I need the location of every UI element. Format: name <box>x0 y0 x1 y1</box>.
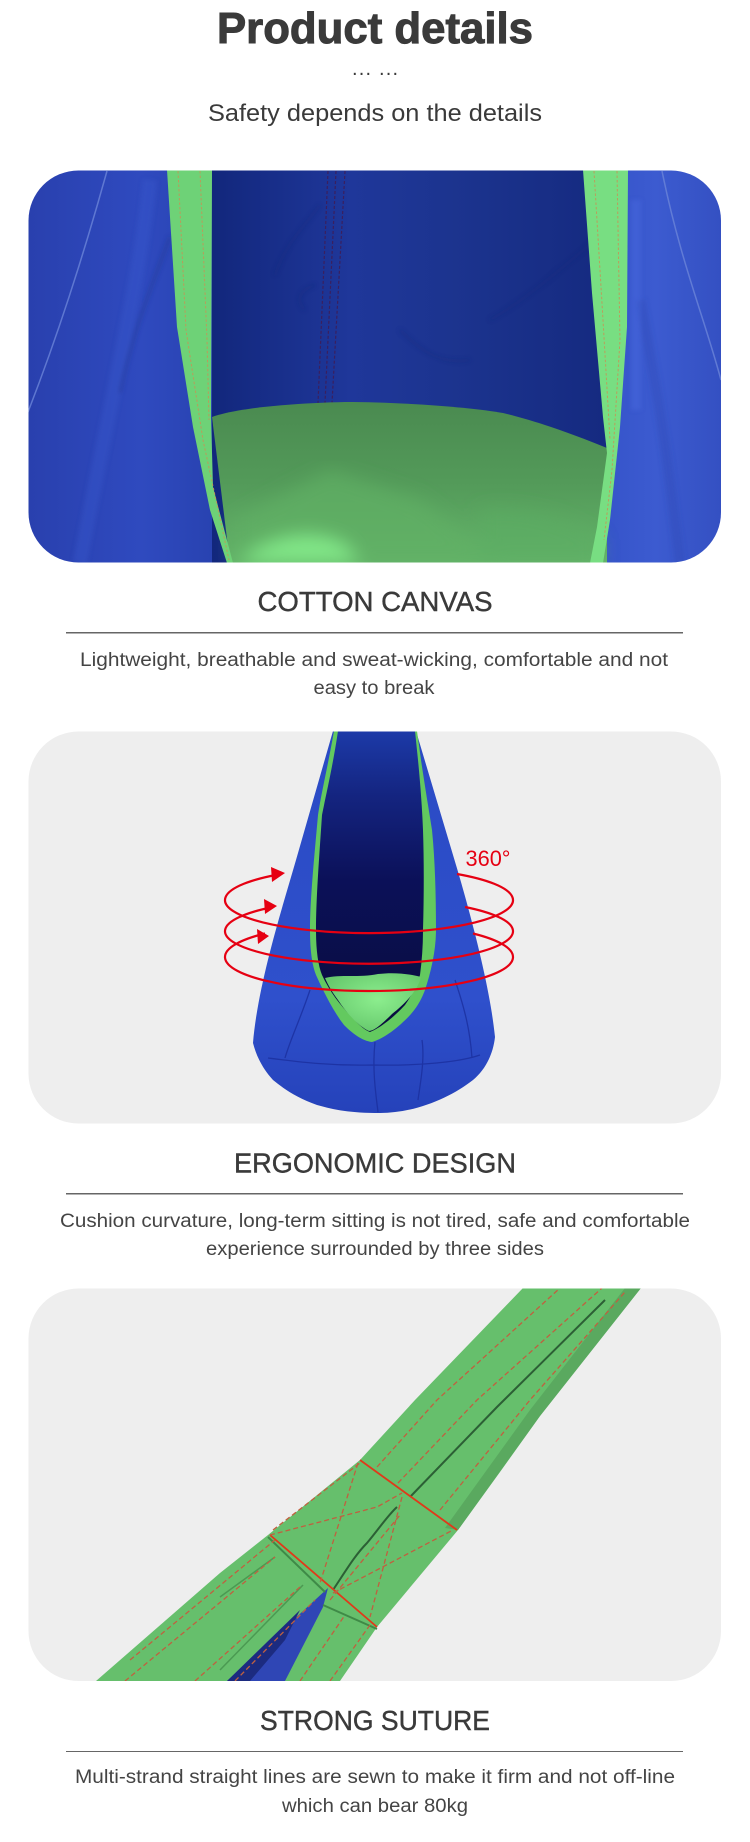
description: cotton canvas: Lightweight, breathable and sweat-wicking, comfortable and not <box>80 650 669 671</box>
decorative ellipsis: ... ... <box>352 58 398 80</box>
left outer blue fabric <box>28 170 212 562</box>
rotation rings <box>225 874 513 991</box>
description: ergonomic design <box>60 1211 690 1260</box>
heading: ergonomic design: ERGONOMIC DESIGN <box>234 1148 516 1178</box>
subtitle: Safety depends on the details <box>208 100 542 127</box>
right outer blue fabric <box>606 170 721 562</box>
middle ring <box>225 907 513 964</box>
pod chair <box>253 731 495 1113</box>
strap stitching <box>178 171 620 560</box>
ring arrowheads <box>257 867 285 944</box>
green strap <box>96 1288 641 1681</box>
description: ergonomic design: Cushion curvature, long-term sitting is not tired, safe and comfortable <box>60 1211 690 1232</box>
divider line <box>66 632 683 634</box>
red stitching <box>125 1288 625 1681</box>
right green strap <box>583 170 628 563</box>
inner back panel <box>212 170 607 563</box>
seat cushion <box>212 402 607 563</box>
panel: cotton canvas photo <box>28 170 722 563</box>
description: cotton canvas: easy to break <box>314 678 435 699</box>
inner panel wrinkles <box>275 205 595 361</box>
cushion highlight <box>235 470 600 563</box>
label: 360 degrees: 360° <box>466 846 510 871</box>
description: strong suture: which can bear 80kg <box>281 1796 468 1817</box>
top ring <box>225 874 513 933</box>
description: strong suture: Multi-strand straight lines are sewn to make it firm and not off-line <box>75 1767 675 1788</box>
pod interior <box>316 731 424 1032</box>
fabric folds <box>77 238 684 562</box>
heading: cotton canvas: COTTON CANVAS <box>258 586 492 617</box>
pod fold lines <box>268 980 480 1112</box>
blue under-fabric <box>227 1588 328 1681</box>
heading: strong suture: STRONG SUTURE <box>260 1705 490 1736</box>
divider line <box>66 1751 683 1752</box>
description: cotton canvas <box>80 650 669 699</box>
strap right edge shading <box>445 1288 641 1530</box>
description: ergonomic design: experience surrounded by three sides <box>206 1239 544 1260</box>
description: strong suture <box>75 1767 675 1817</box>
cushion <box>325 973 421 1031</box>
centre seam <box>318 171 345 403</box>
panel: ergonomic design <box>28 731 721 1124</box>
patch fold edges <box>268 1537 377 1629</box>
strap body <box>96 1288 641 1681</box>
divider line <box>66 1193 683 1194</box>
title: Product details <box>217 4 533 53</box>
green rim <box>310 731 436 1042</box>
dark gap <box>333 1300 605 1590</box>
left green strap <box>167 170 233 563</box>
bottom ring <box>225 934 513 991</box>
pod body <box>253 731 495 1113</box>
panel: strong suture <box>28 1288 721 1681</box>
